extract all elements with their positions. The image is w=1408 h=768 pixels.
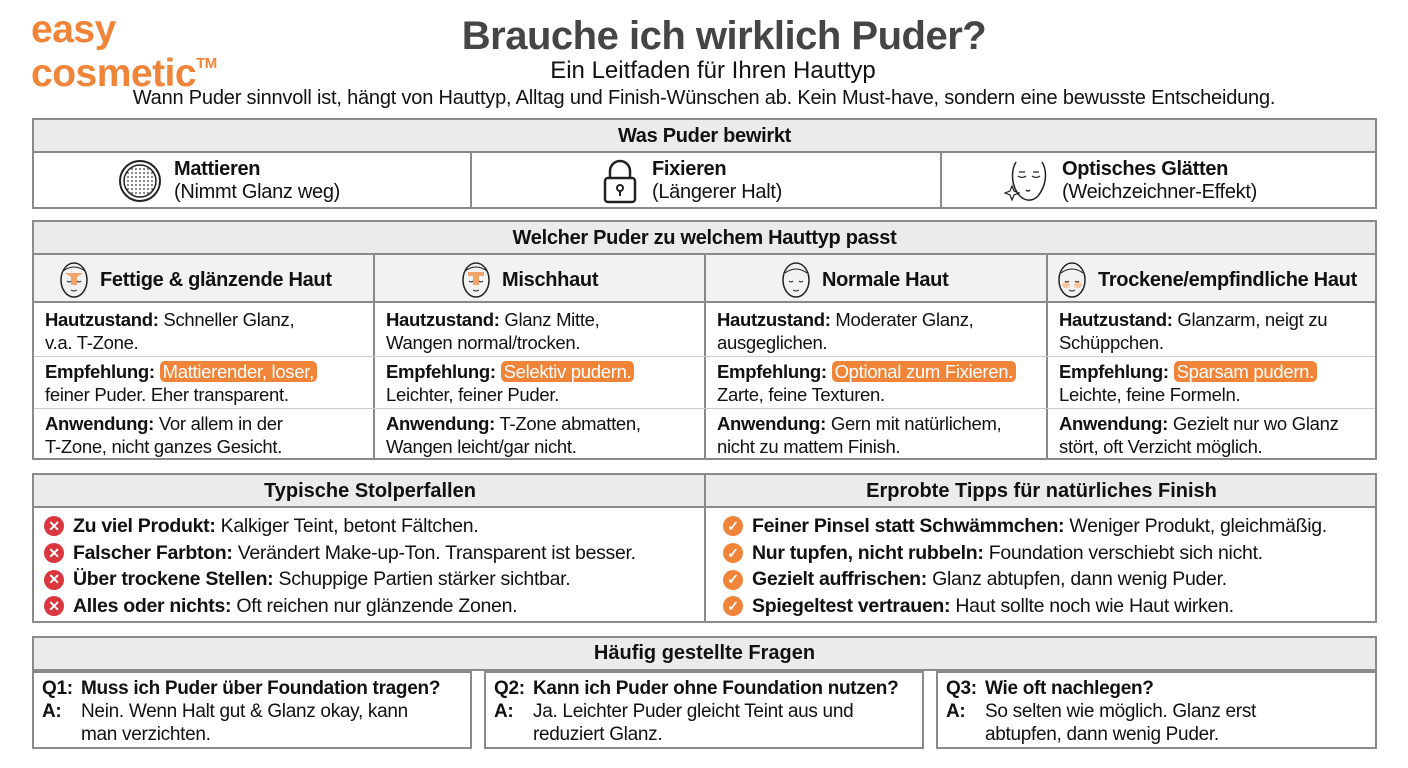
item: Mattieren: Mattieren bbox=[174, 158, 260, 180]
row texts col2: Hautzustand: Glanz Mitte, bbox=[386, 309, 600, 330]
panel: Stolperfallen & Tipps bbox=[32, 473, 1377, 623]
faq 3: Q3: bbox=[946, 678, 977, 699]
list: pitfalls: Über trockene Stellen: Schuppige Partien stärker sichtbar. bbox=[73, 568, 570, 590]
icon: lock bbox=[604, 160, 636, 204]
item: Fixieren: (Längerer Halt) bbox=[652, 181, 782, 203]
row texts col4 bbox=[1059, 309, 1327, 353]
list: pitfalls bbox=[44, 515, 636, 617]
column: Trockene Haut bbox=[1058, 262, 1358, 298]
faq 2: Ja. Leichter Puder gleicht Teint aus und reduziert Glanz. bbox=[533, 701, 853, 745]
title: Brauche ich wirklich Puder? bbox=[462, 14, 986, 58]
panel: Welcher Puder zu welchem Hauttyp: Empfehlung: Selektiv pudern. bbox=[386, 361, 631, 382]
list: tips: ✓ bbox=[727, 571, 739, 587]
panel: FAQ bbox=[32, 636, 1377, 749]
heading bbox=[32, 636, 1377, 671]
row texts col3 bbox=[717, 309, 974, 353]
list: pitfalls: Zu viel Produkt: Kalkiger Teint, betont Fältchen. bbox=[73, 515, 478, 537]
heading: Typische Stolperfallen: Typische Stolperfallen bbox=[264, 480, 476, 502]
item: Mattieren: (Nimmt Glanz weg) bbox=[174, 181, 340, 203]
panel: Was Puder bewirkt bbox=[32, 118, 1377, 209]
item: Optisches Glätten: (Weichzeichner-Effekt) bbox=[1062, 181, 1257, 203]
list: tips: Gezielt auffrischen: Glanz abtupfen, dann wenig Puder. bbox=[752, 568, 1227, 590]
heading bbox=[34, 120, 1375, 153]
logo: easy bbox=[31, 8, 116, 51]
faq 3: So selten wie möglich. Glanz erst abtupfen, dann wenig Puder. bbox=[985, 701, 1256, 745]
row texts col1: v.a. T-Zone. bbox=[45, 332, 138, 353]
faq 1: Q1: bbox=[42, 678, 73, 699]
faq 3: Wie oft nachlegen? bbox=[985, 678, 1154, 699]
column: Fettige Haut: Fettige & glänzende Haut bbox=[100, 268, 332, 290]
list: pitfalls: Falscher Farbton: Verändert Make-up-Ton. Transparent ist besser. bbox=[73, 542, 636, 564]
item: Optisches Glätten: Optisches Glätten bbox=[1062, 158, 1228, 180]
panel: Welcher Puder zu welchem Hauttyp: Anwendung: Gezielt nur wo Glanz bbox=[1059, 413, 1339, 434]
list: tips: ✓ bbox=[727, 598, 739, 614]
faq 1 bbox=[32, 671, 472, 749]
panel: Welcher Puder zu welchem Hauttyp: stört, oft Verzicht möglich. bbox=[1059, 436, 1262, 457]
faq 1: Muss ich Puder über Foundation tragen? bbox=[81, 678, 440, 699]
faq 3 bbox=[936, 671, 1377, 749]
list: pitfalls: ✕ bbox=[48, 571, 60, 587]
row texts col4: Hautzustand: Glanzarm, neigt zu bbox=[1059, 309, 1327, 330]
list: tips: Feiner Pinsel statt Schwämmchen: Weniger Produkt, gleichmäßig. bbox=[752, 515, 1327, 537]
panel: Welcher Puder zu welchem Hauttyp: Empfehlung: Mattierender, loser, bbox=[45, 361, 314, 382]
intro text: Wann Puder sinnvoll ist, hängt von Hauttyp, Alltag und Finish-Wünschen ab. Kein Must-have, sondern eine bewusste Entscheidung. bbox=[133, 87, 1275, 109]
faq 1: Nein. Wenn Halt gut & Glanz okay, kann man verzichten. bbox=[81, 701, 408, 745]
item: Fixieren bbox=[604, 158, 782, 204]
column: Normale Haut: Normale Haut bbox=[822, 268, 948, 290]
faq 3: A: bbox=[946, 701, 965, 722]
panel: Welcher Puder zu welchem Hauttyp: Leichter, feiner Puder. bbox=[386, 384, 559, 405]
panel: Welcher Puder zu welchem Hauttyp: Anwendung: Vor allem in der bbox=[45, 413, 283, 434]
list: tips bbox=[723, 515, 1327, 617]
panel: Welcher Puder zu welchem Hauttyp bbox=[32, 220, 1377, 460]
list: tips: Spiegeltest vertrauen: Haut sollte noch wie Haut wirken. bbox=[752, 595, 1234, 617]
panel: Welcher Puder zu welchem Hauttyp: Empfehlung: Optional zum Fixieren. bbox=[717, 361, 1013, 382]
panel: Welcher Puder zu welchem Hauttyp: nicht zu mattem Finish. bbox=[717, 436, 900, 457]
panel: Welcher Puder zu welchem Hauttyp: T-Zone, nicht ganzes Gesicht. bbox=[45, 436, 282, 457]
list: tips: ✓ bbox=[727, 518, 739, 534]
row texts col1 bbox=[45, 309, 294, 353]
panel: Welcher Puder zu welchem Hauttyp: Anwendung: T-Zone abmatten, bbox=[386, 413, 641, 434]
list: tips: Nur tupfen, nicht rubbeln: Foundation verschiebt sich nicht. bbox=[752, 542, 1263, 564]
faq 1: A: bbox=[42, 701, 61, 722]
item: Fixieren: Fixieren bbox=[652, 158, 726, 180]
logo: cosmeticTM bbox=[31, 52, 217, 95]
row texts col1: Hautzustand: Schneller Glanz, bbox=[45, 309, 294, 330]
row texts col3: ausgeglichen. bbox=[717, 332, 827, 353]
heading: Welcher Puder zu welchem Hauttyp passt bbox=[513, 227, 896, 249]
row texts col2 bbox=[386, 309, 600, 353]
item: Mattieren bbox=[119, 158, 340, 203]
list: pitfalls: ✕ bbox=[48, 545, 60, 561]
faq 2: A: bbox=[494, 701, 513, 722]
heading: Erprobte Tipps: Erprobte Tipps für natürliches Finish bbox=[866, 480, 1217, 502]
logo bbox=[31, 8, 217, 95]
heading: Was Puder bewirkt bbox=[618, 125, 791, 147]
column: Normale Haut bbox=[782, 262, 949, 298]
panel: Welcher Puder zu welchem Hauttyp: feiner Puder. Eher transparent. bbox=[45, 384, 289, 405]
list: pitfalls: Alles oder nichts: Oft reichen nur glänzende Zonen. bbox=[73, 595, 517, 617]
panel: Welcher Puder zu welchem Hauttyp: Leichte, feine Formeln. bbox=[1059, 384, 1240, 405]
panel: Welcher Puder zu welchem Hauttyp: Anwendung: Gern mit natürlichem, bbox=[717, 413, 1001, 434]
faq 2: Kann ich Puder ohne Foundation nutzen? bbox=[533, 678, 898, 699]
heading bbox=[34, 222, 1375, 255]
panel: Welcher Puder zu welchem Hauttyp: Zarte, feine Texturen. bbox=[717, 384, 885, 405]
list: pitfalls: ✕ bbox=[48, 518, 60, 534]
icon: powder compact bbox=[119, 160, 161, 202]
heading: Häufig gestellte Fragen bbox=[594, 642, 815, 664]
column: Trockene Haut: Trockene/empfindliche Haut bbox=[1098, 268, 1357, 290]
row texts col3: Hautzustand: Moderater Glanz, bbox=[717, 309, 974, 330]
faq 2 bbox=[484, 671, 924, 749]
column: Mischhaut: Mischhaut bbox=[502, 268, 598, 290]
faq 2: Q2: bbox=[494, 678, 525, 699]
list: pitfalls: ✕ bbox=[48, 598, 60, 614]
row texts col2: Wangen normal/trocken. bbox=[386, 332, 580, 353]
panel: Welcher Puder zu welchem Hauttyp: Empfehlung: Sparsam pudern. bbox=[1059, 361, 1314, 382]
column: Fettige Haut bbox=[60, 262, 332, 298]
column: Mischhaut bbox=[462, 262, 598, 298]
row texts col4: Schüppchen. bbox=[1059, 332, 1164, 353]
icon: face with sparkle bbox=[1004, 162, 1046, 202]
subtitle: Ein Leitfaden für Ihren Hauttyp bbox=[550, 57, 876, 84]
list: tips: ✓ bbox=[727, 545, 739, 561]
panel: Welcher Puder zu welchem Hauttyp: Wangen leicht/gar nicht. bbox=[386, 436, 577, 457]
item: Optisches Glätten bbox=[1004, 158, 1257, 203]
